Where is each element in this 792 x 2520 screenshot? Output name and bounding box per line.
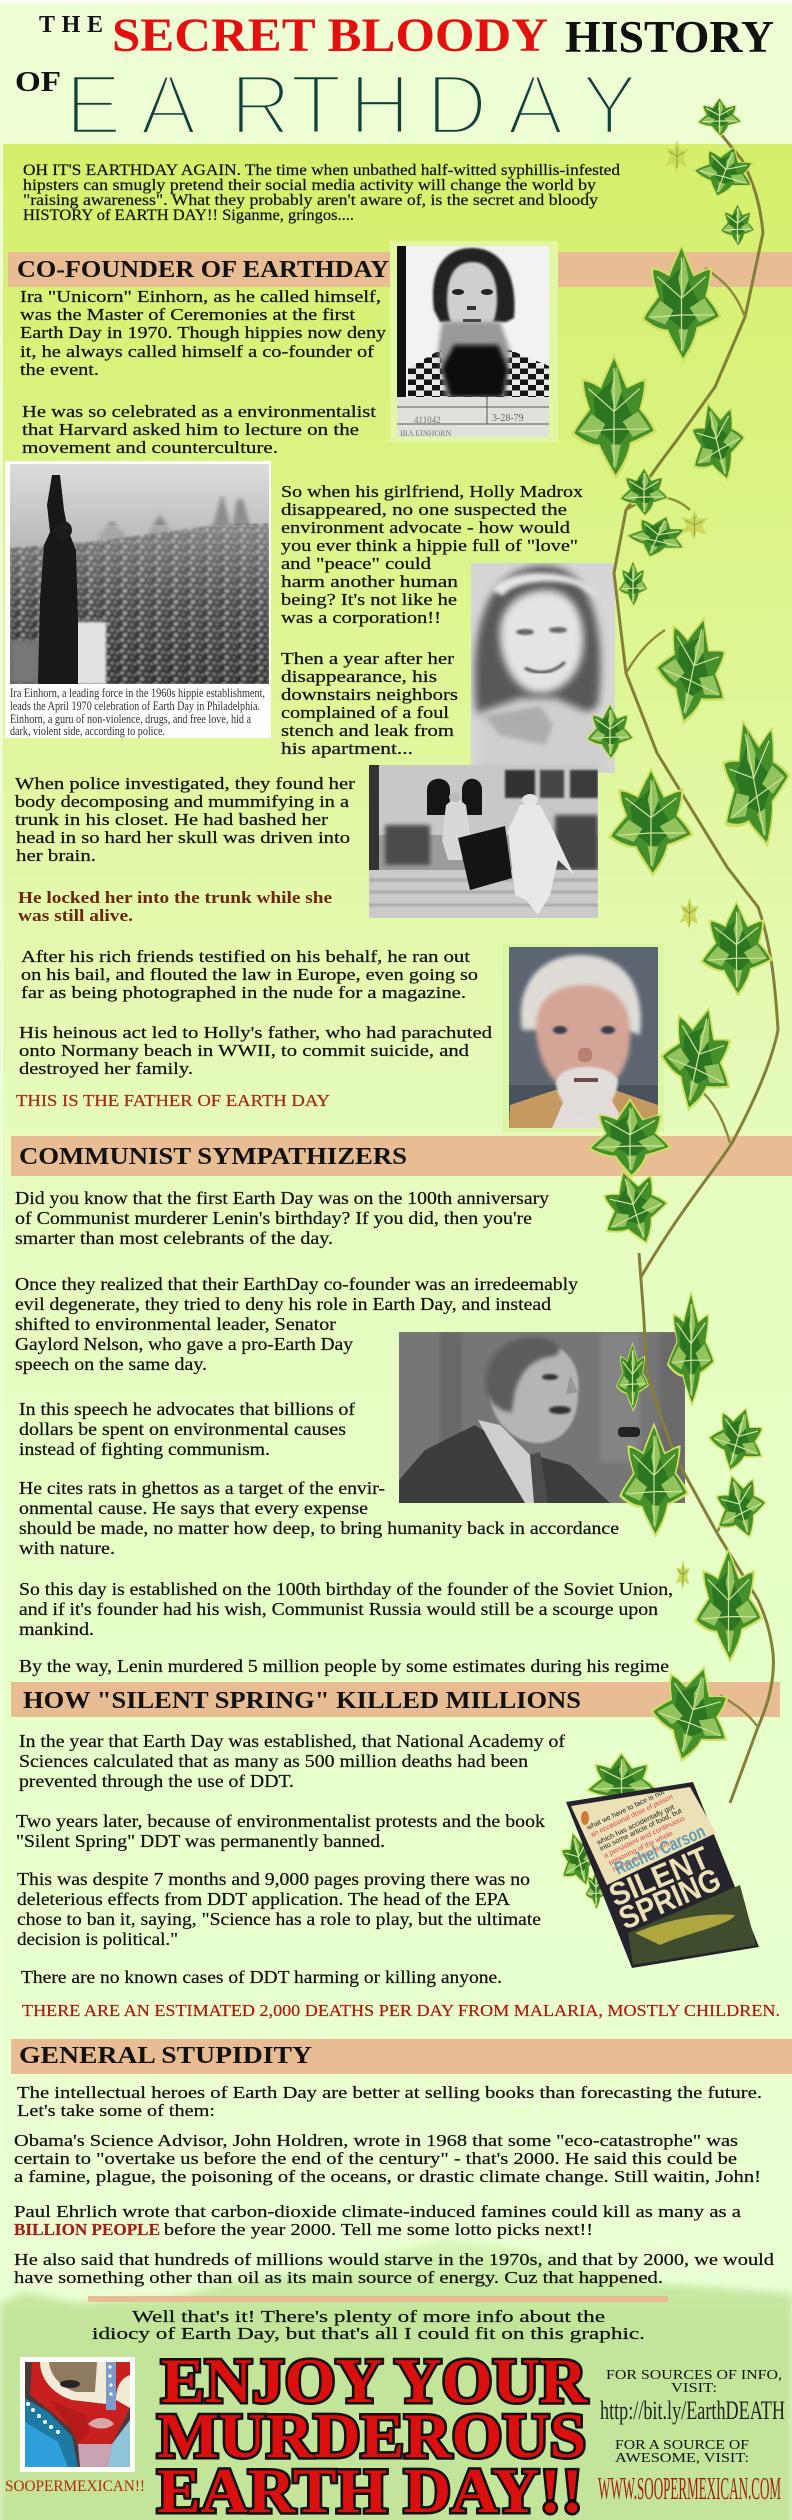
book: Silent Spring: which has accidentally got xyxy=(595,1804,676,1847)
text: communist sympathizers: instead of fighting communism. xyxy=(19,1439,270,1459)
book: Silent Spring: what we have to face is not xyxy=(585,1789,666,1832)
text: communist sympathizers: Gaylord Nelson, who gave a pro-Earth Day xyxy=(15,1334,353,1354)
text: communist sympathizers: smarter than most celebrants of the day. xyxy=(15,1228,333,1248)
text: Holly disappearance: his apartment... xyxy=(281,739,413,758)
text: Holly disappearance: harm another human xyxy=(281,572,459,591)
intro text: OH IT'S EARTHDAY AGAIN. The time when unbathed half-witted syphillis-infested xyxy=(23,162,620,179)
title: EARTHDAY xyxy=(65,58,638,153)
book: Silent Spring: into some article of food, but xyxy=(599,1808,683,1853)
book: Silent Spring: human environment... xyxy=(612,1838,676,1874)
text: general stupidity: The intellectual heroes of Earth Day are better at selling books than forecasting the future. xyxy=(17,2083,762,2102)
text: communist sympathizers xyxy=(15,1188,673,1676)
text: communist sympathizers: Once they realized that their EarthDay co-founder was an irredeemably xyxy=(15,1274,578,1294)
text: Einhorn intro: that Harvard asked him to lecture on the xyxy=(22,420,359,439)
icon: luchador mask portrait xyxy=(20,2357,135,2472)
photo: Einhorn before the crowd, with caption: Ira Einhorn, a leading force in the 1960s hippie establishment, xyxy=(10,686,265,700)
text: communist sympathizers: should be made, no matter how deep, to bring humanity back in accordance xyxy=(19,1518,619,1538)
text: general stupidity: certain to "overtake us before the end of the century" - that's 2000. He said this could be xyxy=(14,2149,737,2168)
photo: Einhorn before the crowd, with caption xyxy=(5,461,271,738)
heading: silent spring: HOW "SILENT SPRING" KILLED MILLIONS xyxy=(23,1688,581,1714)
text: communist sympathizers: dollars be spent on environmental causes xyxy=(19,1419,346,1439)
text: Holly disappearance: and "peace" could xyxy=(281,554,432,573)
text: police investigation xyxy=(15,774,355,865)
book: Silent Spring: SILENT xyxy=(604,1839,715,1913)
text: silent spring: Two years later, because of environmentalist protests and the book xyxy=(16,1811,545,1831)
text: general stupidity: He also said that hundreds of millions would starve in the 1970s, and that by 2000, we would xyxy=(14,2250,775,2269)
photo: police removing the trunk xyxy=(369,765,598,918)
closing note: idiocy of Earth Day, but that's all I could fit on this graphic. xyxy=(92,2324,645,2343)
text: bail and Holly's father: destroyed her family. xyxy=(19,1059,193,1078)
text: Holly disappearance: disappearance, his xyxy=(281,667,437,686)
text: bail and Holly's father: His heinous act led to Holly's father, who had parachuted xyxy=(19,1023,493,1042)
text: general stupidity: have something other than oil as its main source of energy. Cuz that happened. xyxy=(14,2268,663,2287)
decorative ivy vine xyxy=(554,97,792,1910)
text: Einhorn intro: Ira "Unicorn" Einhorn, as he called himself, xyxy=(20,287,381,306)
text: Holly disappearance: Then a year after her xyxy=(281,649,454,668)
title: OF xyxy=(15,67,61,98)
book: Silent Spring: Rachel Carson xyxy=(611,1821,708,1879)
text: police investigation: body decomposing and mummifying in a xyxy=(15,792,350,811)
callout: malaria deaths: THERE ARE AN ESTIMATED 2,000 DEATHS PER DAY FROM MALARIA, MOSTLY CHILDREN. xyxy=(22,2001,780,2020)
text: Einhorn intro: was the Master of Ceremonies at the first xyxy=(20,305,355,324)
book: Silent Spring: an occasional dose of poison xyxy=(590,1794,674,1839)
text: bail and Holly's father: on his bail, and flouted the law in Europe, even going so xyxy=(21,965,478,984)
text: communist sympathizers: mankind. xyxy=(19,1619,94,1639)
callout: locked in trunk: He locked her into the trunk while she xyxy=(18,888,333,907)
photo: Senator Gaylord Nelson xyxy=(399,1332,685,1503)
text: Einhorn intro: the event. xyxy=(20,360,99,379)
text: communist sympathizers: evil degenerate, they tried to deny his role in Earth Day, and instead xyxy=(15,1294,551,1314)
divider bar xyxy=(88,2296,668,2302)
text: Holly disappearance xyxy=(281,482,584,758)
title xyxy=(15,9,774,153)
book: Silent Spring: a persistent and continuous xyxy=(603,1815,687,1860)
callout: locked in trunk xyxy=(18,888,333,925)
photo: older Einhorn mugshot xyxy=(502,944,664,1132)
headline: enjoy your murderous earth day: MURDEROUS xyxy=(157,2401,586,2471)
section bar: silent spring xyxy=(11,1682,780,1717)
text: general stupidity: a famine, plague, the poisoning of the oceans, or drastic climate change. Still waitin, John! xyxy=(14,2167,761,2186)
section bar: general stupidity xyxy=(11,2039,792,2074)
text: silent spring: prevented through the use of DDT. xyxy=(19,1771,294,1791)
photo: Einhorn mugshot xyxy=(390,241,558,442)
text: communist sympathizers: In this speech he advocates that billions of xyxy=(19,1399,355,1419)
text: communist sympathizers: speech on the same day. xyxy=(15,1354,207,1374)
intro text: "raising awareness". What they probably aren't aware of, is the secret and bloody xyxy=(23,192,598,209)
sources block: FOR A SOURCE OF xyxy=(615,2438,749,2453)
text: silent spring: deleterious effects from DDT application. The head of the EPA xyxy=(17,1889,510,1909)
text: police investigation: head in so hard her skull was driven into xyxy=(16,828,350,847)
text: communist sympathizers: He cites rats in ghettos as a target of the envir- xyxy=(19,1478,385,1498)
title: SECRET BLOODY xyxy=(112,9,548,62)
closing note xyxy=(92,2307,645,2343)
photo: Einhorn before the crowd, with caption: dark, violent side, according to police. xyxy=(10,724,165,738)
callout: father of earth day: THIS IS THE FATHER OF EARTH DAY xyxy=(16,1091,330,1110)
photo: Einhorn before the crowd, with caption: leads the April 1970 celebration of Earth Day in Philadelphia. xyxy=(10,699,260,713)
text: silent spring: There are no known cases of DDT harming or killing anyone. xyxy=(21,1967,502,1987)
text: Holly disappearance: So when his girlfriend, Holly Madrox xyxy=(281,482,584,501)
text: Holly disappearance: disappeared, no one suspected the xyxy=(281,500,567,519)
sources block: VISIT: xyxy=(671,2381,717,2396)
text: silent spring: chose to ban it, saying, "Science has a role to play, but the ultimate xyxy=(17,1909,541,1929)
text: Einhorn intro xyxy=(20,287,387,457)
text: general stupidity: Let's take some of them: xyxy=(17,2101,215,2120)
photo: Holly Madrox xyxy=(471,563,615,773)
text: Einhorn intro: He was so celebrated as a environmentalist xyxy=(22,402,376,421)
text: general stupidity: Paul Ehrlich wrote that carbon-dioxide climate-induced famines could kill as many as a xyxy=(14,2202,742,2221)
sources block: AWESOME, VISIT: xyxy=(615,2451,749,2466)
heading: co-founder of earthday: CO-FOUNDER OF EARTHDAY xyxy=(17,257,389,283)
text: communist sympathizers: So this day is established on the 100th birthday of the founder of the Soviet Union, xyxy=(19,1579,673,1599)
photo: Einhorn mugshot: 3-28-79 xyxy=(492,413,524,424)
text: communist sympathizers: of Communist murderer Lenin's birthday? If you did, then you're xyxy=(15,1208,532,1228)
text: bail and Holly's father: far as being photographed in the nude for a magazine. xyxy=(21,983,466,1002)
text: silent spring: This was despite 7 months and 9,000 pages proving there was no xyxy=(17,1869,530,1889)
text: Holly disappearance: environment advocate - how would xyxy=(281,518,571,537)
text: police investigation: When police investigated, they found her xyxy=(15,774,355,793)
photo: Einhorn before the crowd, with caption: Einhorn, a guru of non-violence, drugs, and free love, hid a xyxy=(10,712,251,726)
text: bail and Holly's father: After his rich friends testified on his behalf, he ran out xyxy=(21,947,470,966)
text: Holly disappearance: being? It's not like he xyxy=(281,590,457,609)
text: Einhorn intro: movement and counterculture. xyxy=(22,438,278,457)
text: bail and Holly's father: onto Normany beach in WWII, to commit suicide, and xyxy=(19,1041,470,1060)
heading: communist sympathizers: COMMUNIST SYMPATHIZERS xyxy=(19,1144,407,1170)
text: Holly disappearance: you ever think a hippie full of "love" xyxy=(281,536,578,555)
closing note: Well that's it! There's plenty of more info about the xyxy=(132,2307,605,2326)
text: silent spring xyxy=(16,1731,565,1987)
text: silent spring: In the year that Earth Day was established, that National Academy of xyxy=(19,1731,565,1751)
photo: Einhorn mugshot: 411042 xyxy=(414,415,441,425)
text: Einhorn intro: Earth Day in 1970. Though hippies now deny xyxy=(20,323,387,342)
intro text: HISTORY of EARTH DAY!! Siganme, gringos.... xyxy=(23,207,354,224)
text: general stupidity: BILLION PEOPLE xyxy=(14,2220,160,2239)
heading: general stupidity: GENERAL STUPIDITY xyxy=(19,2043,312,2069)
intro text xyxy=(23,162,620,224)
text: general stupidity: before the year 2000. Tell me some lotto picks next!! xyxy=(164,2220,593,2239)
text: communist sympathizers: onmental cause. He says that every expense xyxy=(19,1498,368,1518)
text: police investigation: her brain. xyxy=(16,846,96,865)
callout: locked in trunk: was still alive. xyxy=(18,906,133,925)
text: Holly disappearance: was a corporation!! xyxy=(281,608,441,627)
text: general stupidity xyxy=(14,2083,775,2287)
label: soopermexican: SOOPERMEXICAN!! xyxy=(5,2478,145,2495)
text: Holly disappearance: downstairs neighbors xyxy=(281,685,458,704)
section bar: co-founder xyxy=(8,252,792,287)
text: Holly disappearance: stench and leak from xyxy=(281,721,454,740)
book: Silent Spring: poisoning of the whole xyxy=(608,1830,674,1867)
text: Holly disappearance: complained of a foul xyxy=(281,703,449,722)
text: silent spring: Sciences calculated that as many as 500 million deaths had been xyxy=(19,1751,528,1771)
book: Silent Spring xyxy=(566,1782,759,1968)
headline: enjoy your murderous earth day: ENJOY YOUR xyxy=(161,2346,589,2416)
sources block xyxy=(598,2368,785,2506)
text: silent spring: decision is political." xyxy=(17,1929,178,1949)
section bar: communist sympathizers xyxy=(11,1136,792,1176)
headline: enjoy your murderous earth day xyxy=(157,2346,589,2520)
text: communist sympathizers: Did you know that the first Earth Day was on the 100th anniversary xyxy=(15,1188,549,1208)
sources block: FOR SOURCES OF INFO, xyxy=(606,2368,782,2383)
text: silent spring: "Silent Spring" DDT was permanently banned. xyxy=(16,1831,385,1851)
text: Einhorn intro: it, he always called himself a co-founder of xyxy=(20,342,374,361)
text: communist sympathizers: with nature. xyxy=(19,1538,115,1558)
text: police investigation: trunk in his closet. He had bashed her xyxy=(15,810,328,829)
text: communist sympathizers: shifted to environmental leader, Senator xyxy=(15,1314,336,1334)
text: general stupidity: Obama's Science Advisor, John Holdren, wrote in 1968 that some "eco-catastrophe" was xyxy=(14,2131,738,2150)
title: HISTORY xyxy=(565,12,774,62)
photo: Einhorn mugshot: IRA EINHORN xyxy=(400,429,452,438)
book: Silent Spring: SPRING xyxy=(613,1861,726,1936)
intro text: hipsters can smugly pretend their social media activity will change the world by xyxy=(23,177,596,194)
text: communist sympathizers: By the way, Lenin murdered 5 million people by some estimates during his regime xyxy=(19,1656,669,1676)
title: THE xyxy=(39,12,103,38)
text: bail and Holly's father xyxy=(19,947,493,1078)
text: communist sympathizers: and if it's founder had his wish, Communist Russia would still be a scourge upon xyxy=(19,1599,658,1619)
